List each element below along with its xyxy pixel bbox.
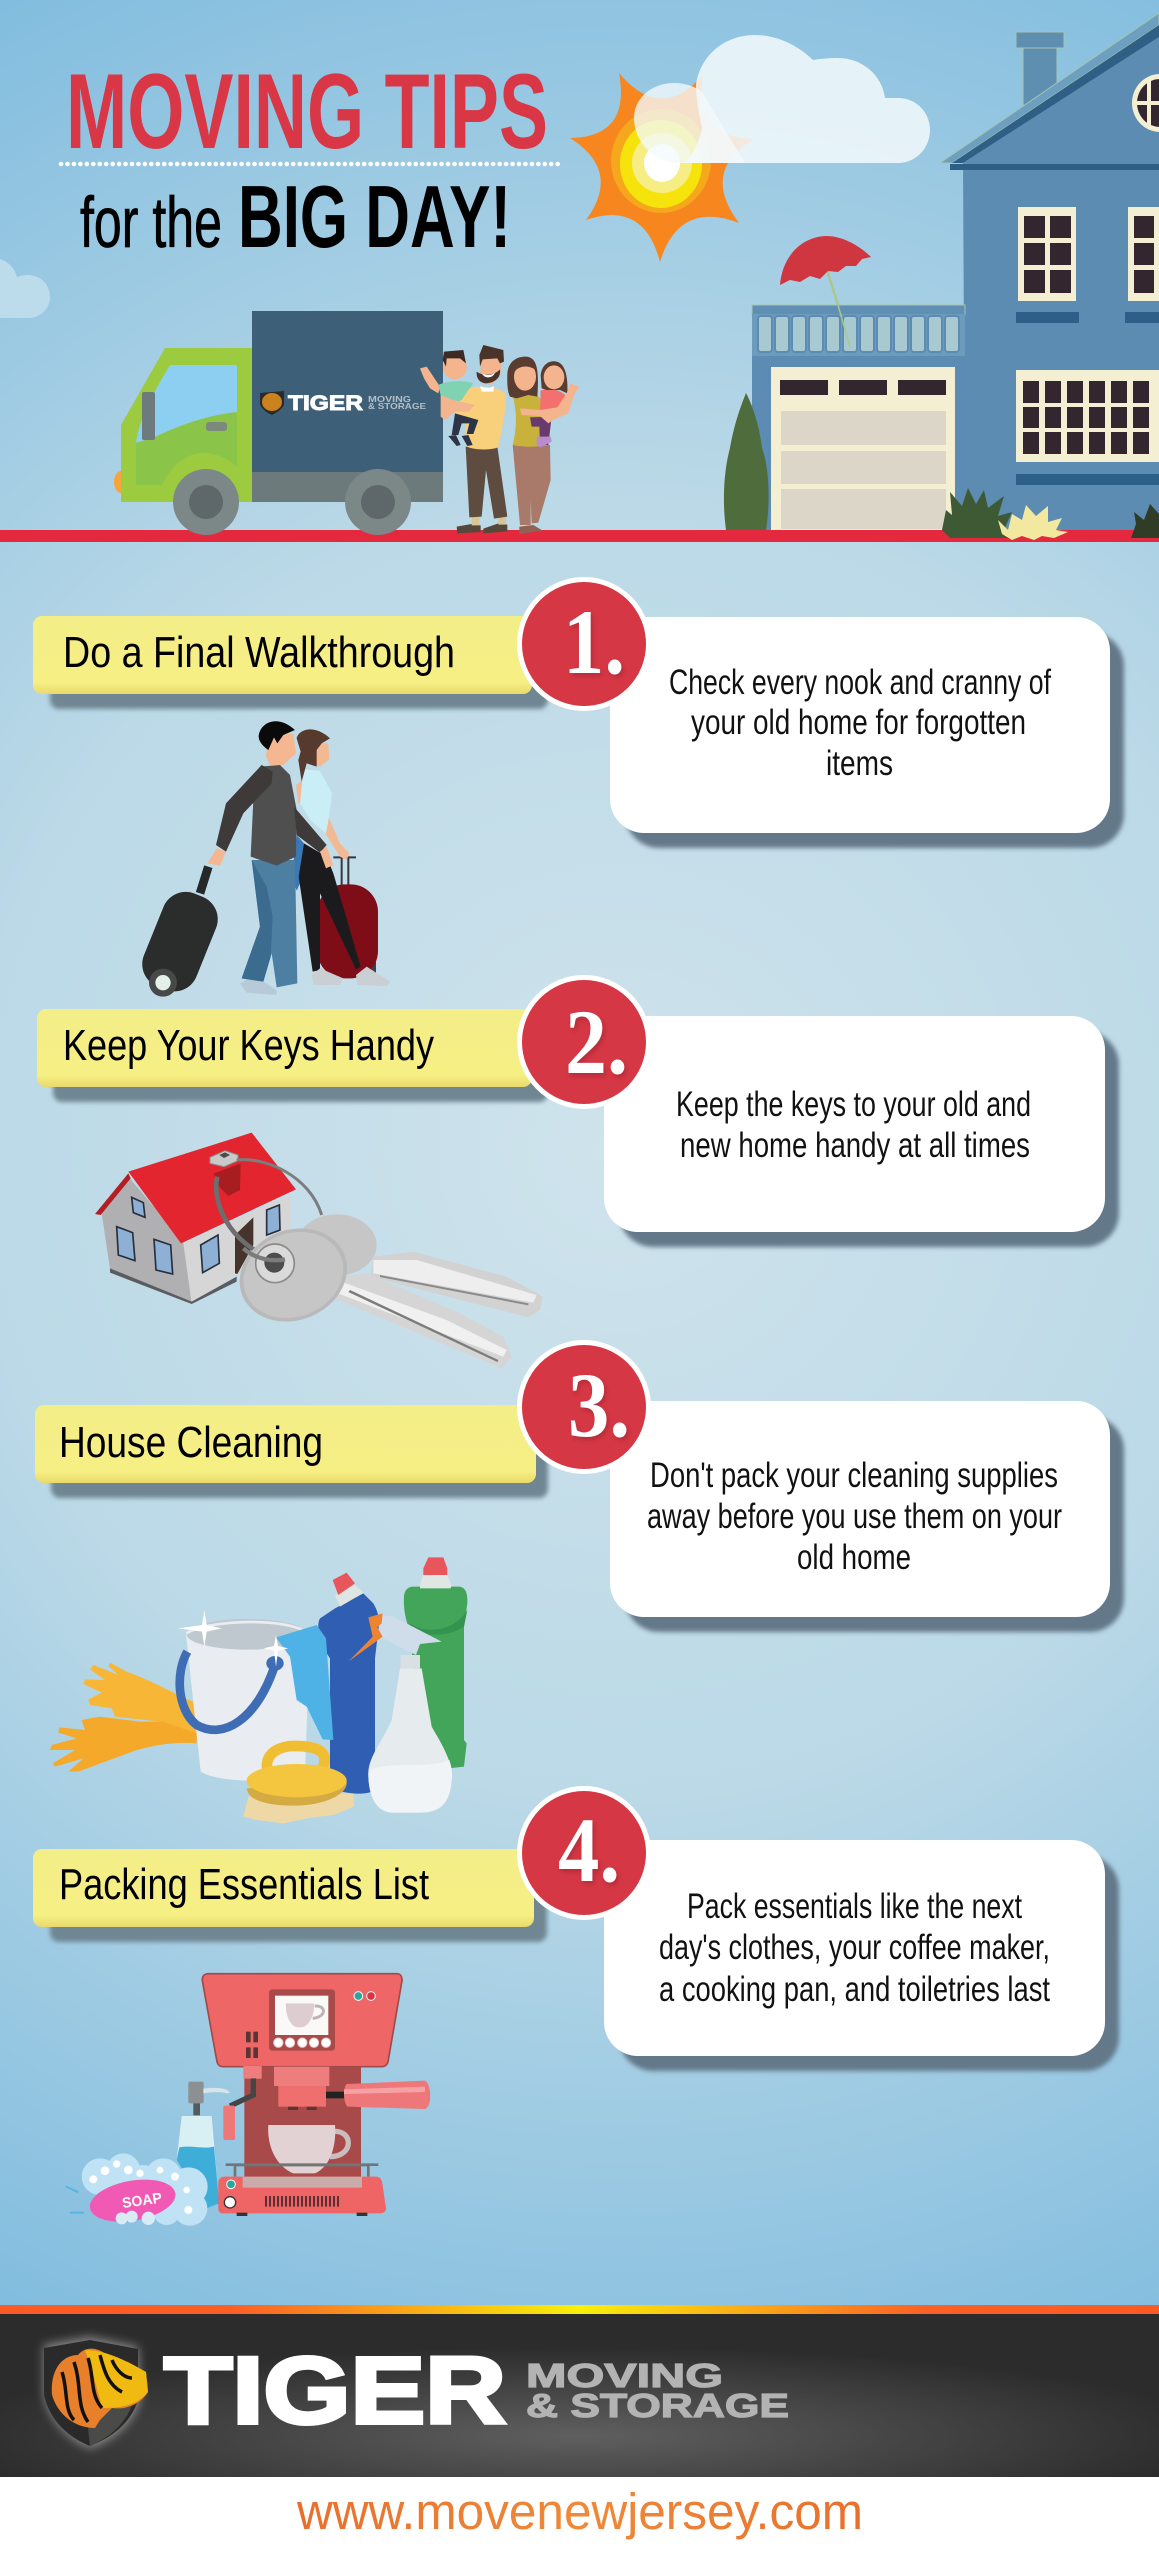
exhaust [114, 471, 128, 493]
man [207, 721, 333, 995]
heading bar shadow [50, 631, 548, 709]
woman [292, 729, 390, 986]
road [0, 530, 1159, 542]
heading bar shadow [51, 1420, 548, 1498]
title [61, 51, 562, 266]
key ring [216, 1160, 322, 1261]
upper window right [1128, 207, 1159, 301]
text card [604, 1016, 1105, 1232]
card shadow [625, 632, 1124, 848]
heading: House Cleaning [59, 1418, 323, 1467]
group head [274, 2067, 329, 2110]
truck logo [260, 391, 426, 415]
gloves [50, 1663, 197, 1772]
machine column [244, 2066, 361, 2178]
plants [942, 488, 1159, 540]
illustration: coffee maker and soap [65, 1974, 430, 2228]
lower window [1016, 370, 1159, 462]
panel: tip 3 [35, 1342, 1124, 1632]
gable and wall [963, 37, 1159, 530]
body text: day's clothes, your coffee maker, [659, 1928, 1050, 1967]
body text: new home handy at all times [680, 1126, 1030, 1165]
scrub brush [243, 1746, 354, 1823]
soap bar with bubbles [65, 2153, 208, 2228]
number badge [520, 1788, 648, 1918]
heading: moving tips: MOVING TIPS [66, 51, 548, 171]
icon: tree [724, 393, 769, 536]
icon: cloud left [0, 259, 50, 318]
red suitcase [317, 857, 378, 978]
machine base [218, 2165, 386, 2216]
icon: tiger shield [44, 2337, 148, 2448]
body text: your old home for forgotten [691, 703, 1026, 742]
website url: www.movenewjersey.com [296, 2483, 863, 2540]
heading bar [33, 1849, 534, 1927]
illustration: couple with luggage [135, 721, 390, 999]
dotted rule [61, 162, 562, 166]
sparkles [178, 1610, 288, 1667]
portafilter handle [326, 2081, 430, 2109]
black suitcase [135, 867, 225, 999]
heading: Packing Essentials List [59, 1860, 429, 1909]
soap dispenser [177, 2082, 230, 2208]
number badge: 4. [560, 1802, 622, 1904]
icon: umbrella [780, 236, 871, 347]
garage door [771, 367, 955, 532]
logo: moving and storage [526, 2357, 789, 2424]
panel: tip 1 [33, 580, 1124, 848]
text card [610, 617, 1110, 833]
subheading: for the big day: BIG DAY! [238, 167, 511, 266]
cab [121, 348, 252, 502]
logo: moving and storage: & STORAGE [526, 2387, 789, 2424]
heading bar shadow [53, 1024, 548, 1102]
body text: Pack essentials like the next [687, 1887, 1022, 1926]
body text: items [826, 744, 893, 783]
body text: a cooking pan, and toiletries last [659, 1970, 1050, 2009]
rear wheel [345, 469, 411, 535]
body text: Don't pack your cleaning supplies [650, 1456, 1058, 1495]
number badge [520, 1342, 648, 1472]
number badge [520, 580, 648, 708]
blue bottle [318, 1573, 379, 1794]
windows [117, 1197, 280, 1274]
cab door [136, 412, 237, 485]
round window [1132, 74, 1159, 132]
machine top [202, 1974, 402, 2067]
heading bar [35, 1405, 536, 1483]
illustration: cleaning supplies [50, 1557, 467, 1823]
subheading: for the big day [80, 167, 511, 266]
garage wall [752, 352, 965, 532]
illustration: house and keys [95, 1133, 543, 1368]
heading bar [37, 1009, 532, 1087]
body text [647, 1456, 1062, 1577]
indicator lights [354, 1992, 375, 2000]
number badge: 2. [565, 991, 628, 1093]
number badge [520, 978, 648, 1106]
icon: sun [570, 73, 754, 262]
girl [520, 361, 579, 447]
number badge: 3. [568, 1354, 630, 1456]
green bottle [404, 1557, 467, 1768]
logo: moving and storage: MOVING [526, 2357, 723, 2394]
keys [225, 1213, 543, 1368]
heading bar [33, 616, 532, 694]
boy [420, 350, 478, 446]
logo: tiger wordmark: TIGER [164, 2338, 506, 2444]
cargo box [252, 311, 443, 472]
number badge: 3. [570, 1357, 632, 1459]
number badge: 1. [565, 594, 627, 696]
man [447, 345, 507, 533]
number badge: 1. [563, 591, 625, 693]
truck logo: MOVING [368, 394, 411, 404]
panel: tip 2 [37, 978, 1119, 1247]
heading bar shadow [50, 1864, 547, 1942]
truck [114, 311, 443, 535]
icon: cloud right [634, 35, 930, 163]
steam wand [223, 2066, 262, 2140]
gradient bar [0, 2305, 1159, 2314]
card shadow [625, 1416, 1124, 1632]
white footer strip [0, 2477, 1159, 2560]
number badge: 2. [567, 994, 630, 1096]
subheading: for the big day: for the [80, 184, 222, 263]
mirror and door handle [142, 392, 227, 440]
text card [604, 1840, 1105, 2056]
front wheel [173, 469, 239, 535]
truck logo: TIGER [288, 392, 363, 415]
screen [269, 1989, 335, 2051]
truck logo: & STORAGE [368, 401, 426, 411]
body text: Check every nook and cranny of [669, 663, 1051, 702]
spray bottle [348, 1613, 452, 1813]
family [420, 345, 579, 534]
upper window left [1018, 207, 1076, 301]
woman [507, 357, 551, 534]
house [724, 13, 1159, 536]
footer [0, 2305, 1159, 2477]
body text: Keep the keys to your old and [676, 1085, 1031, 1124]
body text [669, 663, 1051, 783]
chassis [252, 472, 443, 502]
card shadow [619, 1855, 1119, 2071]
cleaning cloth [276, 1625, 333, 1740]
cab window [136, 365, 237, 443]
side buttons [246, 2032, 258, 2058]
card shadow [619, 1031, 1119, 1247]
body text: old home [797, 1538, 911, 1577]
heading: Do a Final Walkthrough [63, 628, 455, 677]
dark band [0, 2314, 1159, 2477]
panel: tip 4 [33, 1788, 1119, 2071]
cup [268, 2125, 348, 2173]
miniature house [95, 1133, 296, 1304]
number badge: 4. [558, 1799, 620, 1901]
body text [659, 1887, 1050, 2009]
bucket [180, 1619, 310, 1781]
body text [676, 1085, 1031, 1165]
text card [610, 1401, 1110, 1617]
heading: Keep Your Keys Handy [63, 1021, 434, 1070]
balcony [752, 305, 965, 356]
chimney [1016, 32, 1064, 105]
soap bar with bubbles: SOAP [121, 2191, 163, 2212]
